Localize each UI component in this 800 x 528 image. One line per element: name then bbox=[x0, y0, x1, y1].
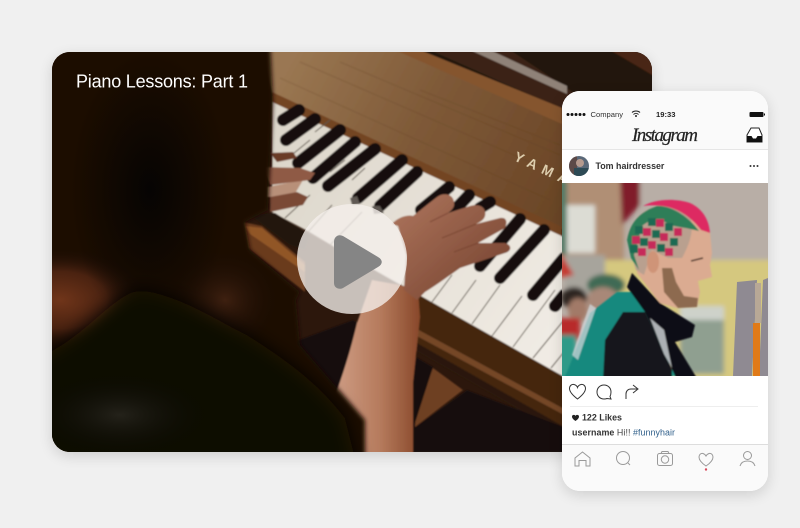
man: beard bbox=[662, 268, 698, 308]
dark gap below keys bbox=[250, 213, 310, 250]
blurred figure bbox=[0, 40, 365, 470]
icon: play triangle bbox=[334, 235, 382, 289]
man: collar bbox=[627, 273, 698, 380]
icon: profile bbox=[740, 452, 755, 466]
caption: username Hi!! #funnyhair bbox=[572, 428, 675, 438]
man: right vest strip bbox=[670, 369, 676, 376]
warm hair patches bbox=[0, 248, 145, 352]
play button bbox=[297, 204, 407, 314]
dark upper cabinet bbox=[380, 50, 654, 270]
icon: more dots bbox=[750, 165, 758, 167]
hair silhouette bbox=[40, 40, 365, 464]
icon: home bbox=[575, 452, 590, 466]
logo: Instagram bbox=[631, 125, 698, 146]
carrier: Company bbox=[590, 110, 623, 119]
man: eye bbox=[691, 258, 703, 261]
forearm bbox=[330, 280, 420, 454]
right hand bbox=[392, 194, 510, 300]
bottom navigation bbox=[562, 444, 768, 491]
app header bbox=[562, 91, 768, 150]
time: 19:33 bbox=[656, 110, 675, 119]
icon: comment bbox=[597, 385, 611, 399]
icon: inbox bbox=[747, 128, 762, 142]
brand lettering: YAMA bbox=[512, 148, 576, 190]
floor bbox=[415, 368, 463, 427]
blurred street background bbox=[558, 178, 775, 380]
finger shading bbox=[430, 213, 478, 252]
keyboard rim bbox=[272, 92, 562, 240]
notification dot bbox=[705, 468, 707, 471]
pale reflection strip bbox=[470, 50, 567, 94]
top wood moulding bbox=[395, 50, 562, 124]
avatar bbox=[569, 156, 589, 176]
panel: instagram phone bbox=[562, 91, 768, 491]
shoulder highlight bbox=[30, 373, 210, 457]
man: pink hair stripe bbox=[643, 200, 710, 233]
panel: video card bbox=[52, 52, 652, 452]
post photo bbox=[558, 178, 775, 380]
post actions bbox=[570, 384, 638, 399]
key grey tips bbox=[350, 196, 384, 214]
icon: battery bbox=[750, 112, 765, 117]
piano body bbox=[243, 50, 654, 454]
status dots bbox=[566, 113, 586, 116]
man: jacket bbox=[603, 312, 672, 380]
man figure bbox=[563, 200, 712, 380]
dark trousers bbox=[280, 320, 566, 452]
crate boards bbox=[733, 278, 768, 376]
man: face and neck bbox=[636, 219, 712, 308]
fallboard bbox=[262, 50, 654, 270]
icon: wifi bbox=[632, 111, 640, 116]
man: vest logo stripe bbox=[572, 304, 596, 360]
black keys bbox=[283, 110, 564, 306]
man: shaved scalp bbox=[633, 207, 692, 275]
icon: heart bbox=[570, 384, 586, 399]
man: lanyard bbox=[650, 318, 672, 368]
post author row bbox=[569, 156, 758, 176]
wood grain bbox=[280, 62, 560, 200]
title: Piano Lessons: Part 1 bbox=[76, 72, 248, 92]
likes count: 122 Likes bbox=[582, 412, 622, 422]
white keys bbox=[272, 102, 566, 378]
author name: Tom hairdresser bbox=[596, 161, 665, 171]
photo: piano scene bbox=[0, 40, 654, 470]
left ledge bbox=[243, 222, 305, 292]
shoulder bbox=[30, 290, 358, 470]
left hand bbox=[263, 152, 315, 212]
man: checker squares bbox=[632, 219, 682, 256]
key gaps bbox=[285, 120, 564, 368]
icon: share bbox=[626, 385, 638, 399]
man: green hair band bbox=[627, 206, 699, 270]
icon: camera bbox=[658, 452, 672, 466]
man: ear bbox=[647, 251, 659, 273]
man: vest bbox=[563, 292, 672, 380]
icon: activity heart bbox=[699, 453, 713, 466]
front beam bbox=[272, 212, 566, 430]
icon: search bbox=[616, 452, 630, 465]
